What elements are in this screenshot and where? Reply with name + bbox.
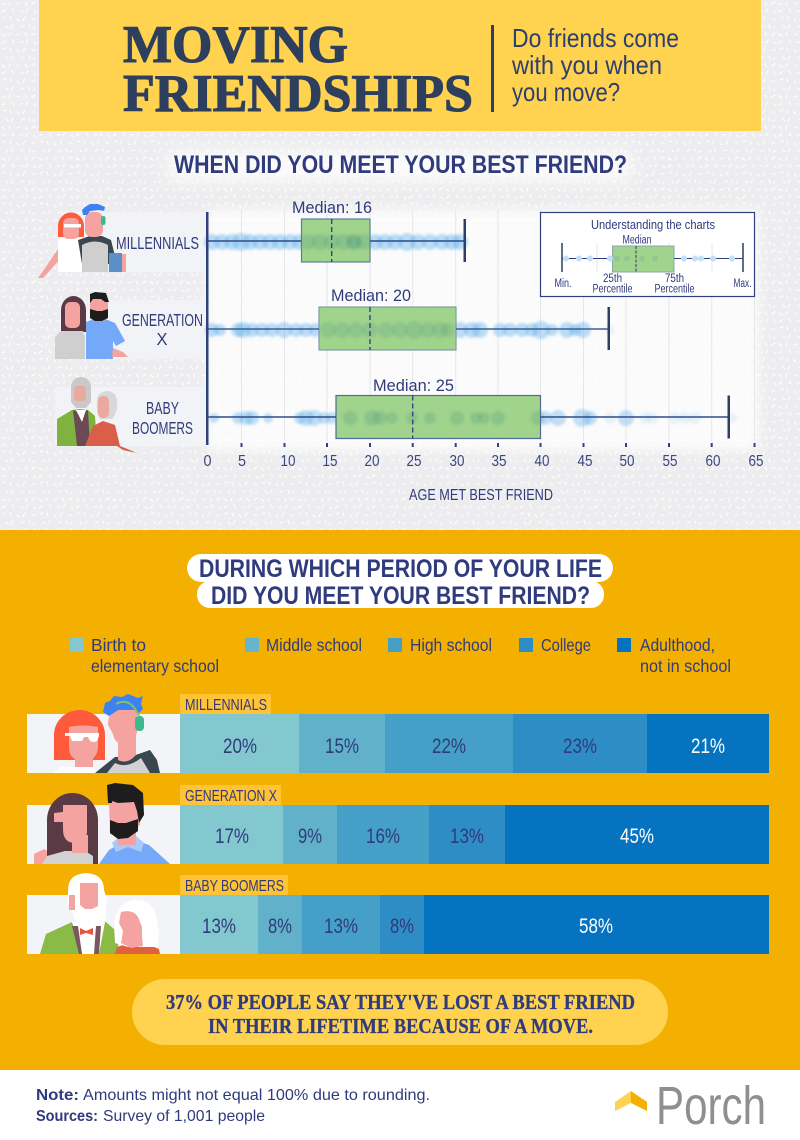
bar segments: 22% xyxy=(432,735,466,758)
label panel: X xyxy=(156,329,168,349)
bar segments: 9% xyxy=(298,825,322,848)
icon: baby boomer heads xyxy=(40,873,160,954)
bar segments xyxy=(180,714,769,773)
tab label xyxy=(180,694,271,714)
x axis: 60 xyxy=(706,453,721,470)
bar segments: 45% xyxy=(620,825,654,848)
tab label xyxy=(180,785,281,805)
footer note: Amounts might not equal 100% due to rounding. xyxy=(83,1087,430,1104)
tab label: MILLENNIALS xyxy=(185,697,267,714)
legend box: understanding the charts: 25th xyxy=(603,273,622,285)
label panel xyxy=(55,387,205,446)
bar segments: 16% xyxy=(366,825,400,848)
bar segments: 17% xyxy=(215,825,249,848)
bar segments: 20% xyxy=(223,735,257,758)
callout: IN THEIR LIFETIME BECAUSE OF A MOVE. xyxy=(208,1014,593,1038)
x axis xyxy=(204,443,764,504)
legend box: understanding the charts: 75th xyxy=(665,273,684,285)
bar segments: 8% xyxy=(268,915,292,938)
tab label: GENERATION X xyxy=(185,788,277,805)
x axis: 30 xyxy=(450,453,465,470)
label panel xyxy=(60,212,205,272)
legend box: understanding the charts: Median xyxy=(622,234,652,246)
logo: Porch: Porch xyxy=(656,1076,766,1136)
header banner xyxy=(39,0,761,131)
logo: Porch xyxy=(615,1076,766,1136)
label panel: GENERATION xyxy=(122,310,203,330)
callout: 37% OF PEOPLE SAY THEY'VE LOST A BEST FRIEND xyxy=(166,990,635,1014)
bar segments: 13% xyxy=(202,915,236,938)
icon: generation x couple xyxy=(55,292,128,359)
stacked bar: generation x xyxy=(27,783,769,864)
axis title: AGE MET BEST FRIEND xyxy=(409,487,553,504)
legend box: understanding the charts xyxy=(540,212,754,296)
patterned background xyxy=(0,0,800,530)
box plot chart xyxy=(38,198,764,504)
bar segments: 13% xyxy=(450,825,484,848)
icon: baby boomer couple xyxy=(57,377,137,453)
footer note: Sources: xyxy=(36,1108,98,1125)
median label: Median: 20 xyxy=(331,286,411,305)
tab label: BABY BOOMERS xyxy=(185,878,284,895)
median label: Median: 25 xyxy=(373,376,454,395)
subtitle: with you when xyxy=(511,50,662,80)
subtitle xyxy=(511,23,679,107)
subtitle: you move? xyxy=(512,77,620,107)
legend box: understanding the charts: Percentile xyxy=(592,284,632,296)
colour legend: Middle school xyxy=(266,635,362,655)
x axis: 5 xyxy=(238,453,246,470)
label panel: BABY xyxy=(146,398,179,418)
heading: during which period: DURING WHICH PERIOD OF YOUR LIFE xyxy=(199,555,602,583)
icon: generation x heads xyxy=(34,783,170,864)
footer note: Note: xyxy=(36,1087,79,1104)
x axis: 50 xyxy=(620,453,635,470)
x axis: 65 xyxy=(748,453,764,470)
bar segments: 23% xyxy=(563,735,597,758)
x axis: 25 xyxy=(406,453,422,470)
colour legend: not in school xyxy=(640,656,731,676)
footer note xyxy=(36,1087,430,1125)
x axis: 35 xyxy=(492,453,507,470)
panel: life period xyxy=(0,530,800,1070)
heading: during which period: DID YOU MEET YOUR BEST FRIEND? xyxy=(211,582,590,610)
colour legend: elementary school xyxy=(91,656,219,676)
title: MOVING xyxy=(123,16,348,74)
tab label xyxy=(180,875,288,895)
bar segments: 21% xyxy=(691,735,725,758)
label panel xyxy=(60,300,205,359)
x axis: 20 xyxy=(364,453,380,470)
colour legend xyxy=(70,635,731,676)
colour legend: Birth to xyxy=(91,635,146,655)
legend box: understanding the charts: Percentile xyxy=(654,284,694,296)
bar segments xyxy=(180,895,769,954)
bar segments xyxy=(180,805,769,864)
row: baby boomers xyxy=(55,376,737,453)
x axis: 40 xyxy=(534,453,550,470)
footer note: Survey of 1,001 people xyxy=(103,1108,265,1125)
stacked bar: millennials xyxy=(27,694,769,773)
title xyxy=(123,16,473,123)
bar segments: 13% xyxy=(324,915,358,938)
icon: millennial heads xyxy=(53,694,160,773)
icon: millennial couple xyxy=(38,204,126,278)
legend box: understanding the charts: Understanding the charts xyxy=(591,217,715,232)
x axis: 0 xyxy=(204,453,212,470)
label panel: BOOMERS xyxy=(132,418,193,438)
colour legend: College xyxy=(541,635,591,655)
whisker plot: millennials xyxy=(204,198,468,262)
callout xyxy=(132,979,668,1045)
x axis: 15 xyxy=(322,453,338,470)
x axis: 45 xyxy=(578,453,593,470)
legend box: understanding the charts: Min. xyxy=(554,278,572,290)
colour legend: High school xyxy=(410,635,492,655)
bar segments: 15% xyxy=(325,735,359,758)
row: millennials xyxy=(38,198,468,278)
median label: Median: 16 xyxy=(292,198,372,217)
row: generation x xyxy=(55,286,615,359)
legend box: understanding the charts: Max. xyxy=(734,278,752,290)
bar segments: 58% xyxy=(579,915,613,938)
label panel: MILLENNIALS xyxy=(116,233,199,253)
whisker plot: generation x xyxy=(205,286,615,350)
bar segments: 8% xyxy=(390,915,414,938)
subtitle: Do friends come xyxy=(512,23,679,53)
colour legend: Adulthood, xyxy=(640,635,715,655)
x axis: 10 xyxy=(280,453,296,470)
stacked bar: baby boomers xyxy=(27,873,769,954)
title: FRIENDSHIPS xyxy=(123,65,473,123)
heading: during which period xyxy=(187,554,613,610)
x axis: 55 xyxy=(662,453,678,470)
whisker plot: baby boomers xyxy=(207,376,737,438)
heading: when did you meet: WHEN DID YOU MEET YOUR BEST FRIEND? xyxy=(174,151,627,179)
